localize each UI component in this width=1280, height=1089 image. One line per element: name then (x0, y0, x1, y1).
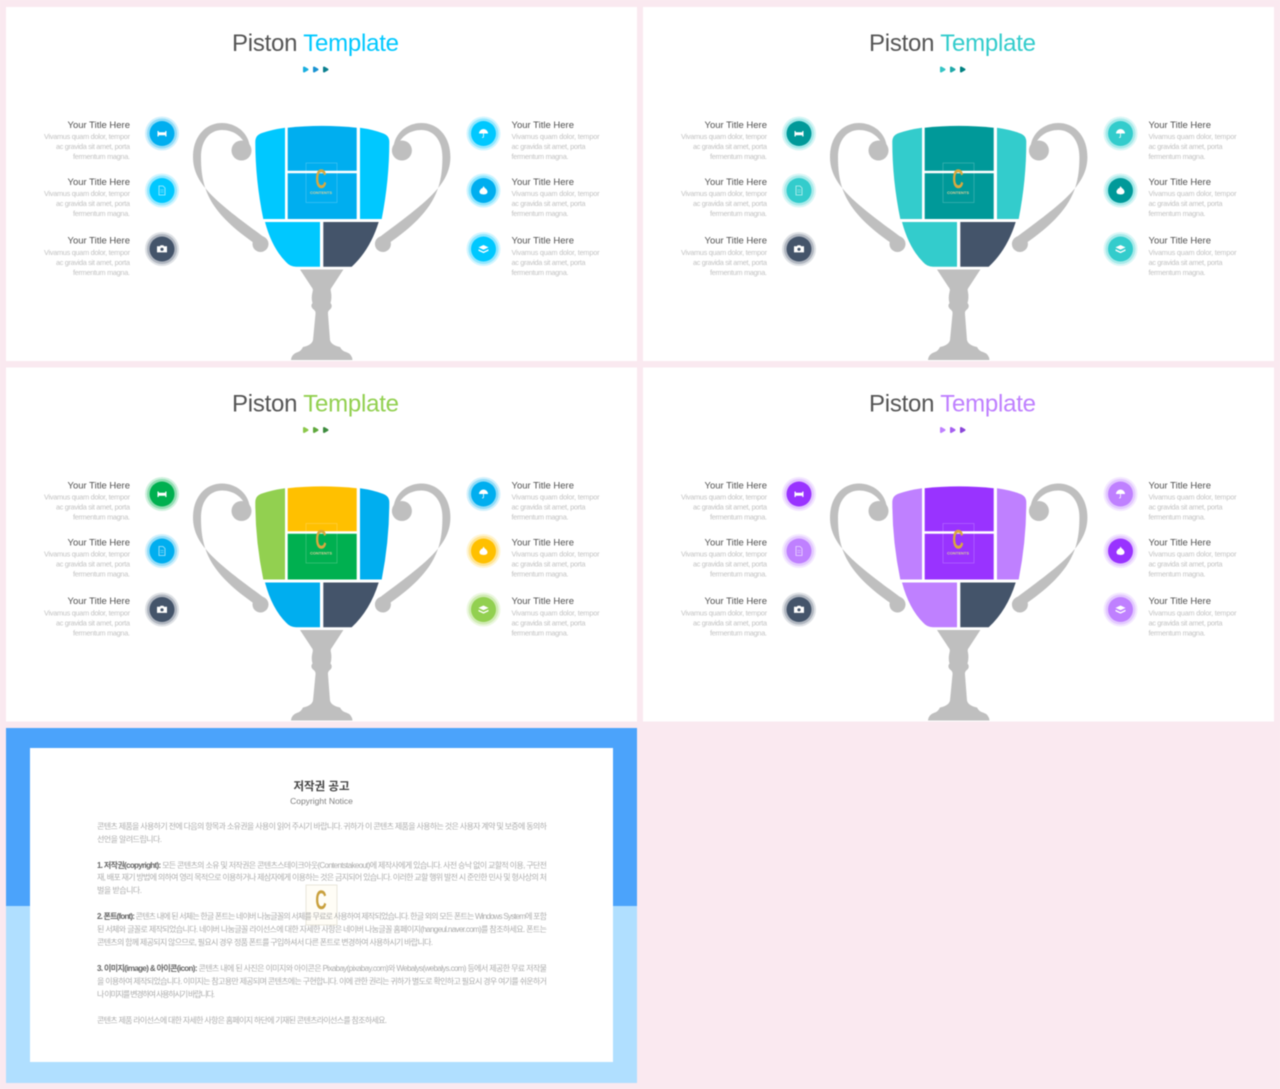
item left 3: Your Title Here (704, 596, 767, 607)
item right 3 (1104, 232, 1237, 277)
panel: copyright notice (6, 728, 637, 1083)
item right 1 (1104, 477, 1237, 522)
item right 1: Vivamus quam dolor, tempor (512, 492, 600, 502)
item left 1: Vivamus quam dolor, tempor (44, 132, 131, 141)
arrows (941, 428, 964, 432)
item right 2: Vivamus quam dolor, tempor (1148, 189, 1237, 198)
item right 2: Vivamus quam dolor, tempor (512, 189, 600, 198)
logo: C (315, 164, 327, 194)
item right 3: Your Title Here (512, 596, 574, 607)
logo: CONTENTS (947, 550, 969, 556)
item right 2 (466, 174, 600, 218)
item left 2: fermentum magna. (73, 570, 130, 578)
logo (943, 163, 974, 202)
item right 1: fermentum magna. (1148, 512, 1206, 522)
arrows (304, 68, 328, 72)
item left 3: ac gravida sit amet, porta (56, 618, 131, 628)
item left 2 (44, 534, 179, 578)
section 1 text: 재, 배포 재기 방법에 의하여 영리 목적으로 이용하거나 제삼자에게 이용하는 것은 금지되어 있습니다. 이러한 교할 행위 발전 시 준인한 민사 및 형사상의 처 (97, 872, 547, 882)
trophy (193, 484, 450, 720)
item right 1 (1104, 116, 1237, 161)
item right 1: ac gravida sit amet, porta (512, 142, 586, 151)
trophy (830, 484, 1087, 720)
item right 3: Vivamus quam dolor, tempor (512, 608, 600, 618)
item right 2: Vivamus quam dolor, tempor (512, 550, 600, 558)
logo (306, 163, 337, 202)
intro text (97, 821, 548, 844)
item left 2: fermentum magna. (710, 570, 767, 578)
item left 3: Your Title Here (704, 236, 767, 246)
item left 3 (681, 232, 816, 277)
item left 1 (681, 477, 816, 522)
item right 3: ac gravida sit amet, porta (1148, 618, 1223, 628)
arrows (941, 68, 964, 72)
section 2 text: 2. 폰트(font): 콘텐츠 내에 된 서체는 한글 폰트는 네이버 나눔글꼴의 서체를 무료로 사용하여 제작되었습니다. 한글 외의 모든 폰트는 Windows System에 포함 (97, 911, 548, 921)
logo: C (952, 524, 964, 555)
item right 2: Your Title Here (512, 538, 574, 548)
item left 1: Vivamus quam dolor, tempor (681, 492, 768, 502)
item right 2: fermentum magna. (1148, 209, 1206, 218)
logo: CONTENTS (310, 190, 332, 195)
section 3 text: 나 이미지를 변경하여 사용하시기 바랍니다. (97, 989, 215, 999)
item left 3: fermentum magna. (73, 628, 130, 638)
item left 1: fermentum magna. (73, 152, 130, 161)
item left 3: ac gravida sit amet, porta (56, 258, 131, 267)
item right 2: fermentum magna. (512, 570, 568, 578)
item left 1: Your Title Here (68, 480, 130, 492)
item right 1: Your Title Here (1148, 120, 1211, 131)
item right 1 (466, 116, 600, 161)
heading: 저작권 공고 (293, 779, 350, 793)
item left 2: ac gravida sit amet, porta (56, 199, 131, 208)
intro text: 콘텐츠 제품을 사용하기 전에 다음의 항목과 소유권을 사용이 읽어 주시기 바랍니다. 귀하가 이 콘텐츠 제품을 사용하는 것은 사용자 계약 및 보증에 동의하 (97, 821, 548, 831)
item right 3: fermentum magna. (512, 628, 568, 638)
item left 1 (44, 116, 179, 161)
item left 1: Your Title Here (704, 120, 767, 131)
panel: multicolour slide (6, 368, 637, 722)
title: Piston Template (869, 390, 1036, 418)
item left 2: Vivamus quam dolor, tempor (681, 189, 768, 198)
item left 3: Vivamus quam dolor, tempor (44, 608, 131, 618)
subheading: Copyright Notice (290, 796, 353, 806)
item left 3 (44, 592, 179, 638)
item right 2: ac gravida sit amet, porta (1148, 560, 1223, 568)
section 1 text: 벌을 받습니다. (97, 885, 142, 895)
item right 1: Your Title Here (512, 480, 574, 492)
item right 2 (1104, 534, 1237, 578)
item right 3 (466, 232, 600, 277)
intro text: 선언을 알려드립니다. (97, 834, 162, 844)
item right 3: fermentum magna. (1148, 268, 1206, 277)
item right 1: ac gravida sit amet, porta (512, 502, 586, 512)
item left 2: ac gravida sit amet, porta (693, 560, 768, 568)
item right 2: Your Title Here (1148, 538, 1211, 548)
item right 1: Vivamus quam dolor, tempor (1148, 132, 1237, 141)
item left 1: fermentum magna. (710, 512, 767, 522)
item left 1: ac gravida sit amet, porta (56, 502, 131, 512)
item right 3 (466, 592, 600, 638)
item left 2 (681, 174, 816, 218)
item left 1: fermentum magna. (73, 512, 130, 522)
item left 1: ac gravida sit amet, porta (693, 502, 768, 512)
item right 1: Vivamus quam dolor, tempor (512, 132, 600, 141)
item left 1 (681, 116, 816, 161)
item right 3: Vivamus quam dolor, tempor (512, 248, 600, 257)
item left 3: ac gravida sit amet, porta (693, 618, 768, 628)
item right 1: Your Title Here (512, 120, 574, 131)
item right 1: fermentum magna. (512, 152, 568, 161)
item left 3: fermentum magna. (73, 268, 130, 277)
item right 2: fermentum magna. (512, 209, 568, 218)
item right 1: Vivamus quam dolor, tempor (1148, 492, 1237, 502)
item left 3: Your Title Here (68, 596, 130, 607)
item left 3: Vivamus quam dolor, tempor (681, 608, 768, 618)
item right 3: fermentum magna. (1148, 628, 1206, 638)
item left 2: ac gravida sit amet, porta (56, 560, 131, 568)
item left 1: Vivamus quam dolor, tempor (44, 492, 131, 502)
item right 3: Your Title Here (1148, 236, 1211, 246)
item left 3: ac gravida sit amet, porta (693, 258, 768, 267)
item left 1: Your Title Here (68, 120, 130, 131)
item right 3: Your Title Here (512, 236, 574, 246)
item right 1: fermentum magna. (1148, 152, 1206, 161)
item left 3 (44, 232, 179, 277)
item left 3: fermentum magna. (710, 628, 767, 638)
arrows (304, 428, 328, 432)
item right 1: ac gravida sit amet, porta (1148, 142, 1223, 151)
item left 2: Your Title Here (704, 177, 767, 188)
section 3 text: 을 이용하여 제작되었습니다. 이미지는 참고용만 제공되며 콘텐츠에는 구현합니다. 이에 관한 권리는 귀하가 별도로 확인하고 필요시 경우 여기를 쉬운하거 (97, 976, 547, 986)
item right 1: Your Title Here (1148, 480, 1211, 492)
item left 2: ac gravida sit amet, porta (693, 199, 768, 208)
item left 1: Your Title Here (704, 480, 767, 492)
section 1 text (97, 860, 547, 895)
section 2 text (97, 911, 548, 947)
item right 2: ac gravida sit amet, porta (512, 199, 586, 208)
closing text: 콘텐츠 제품 라이선스에 대한 자세한 사항은 홈페이지 하단에 기재된 콘텐츠라이선스를 참조하세요. (97, 1015, 387, 1025)
item left 2: Vivamus quam dolor, tempor (44, 189, 131, 198)
item left 3 (681, 592, 816, 638)
item right 3 (1104, 592, 1237, 638)
item right 3: Your Title Here (1148, 596, 1211, 607)
item left 3: Vivamus quam dolor, tempor (44, 248, 131, 257)
item right 1: ac gravida sit amet, porta (1148, 502, 1223, 512)
item right 3: ac gravida sit amet, porta (1148, 258, 1223, 267)
item right 3: fermentum magna. (512, 268, 568, 277)
item left 2 (44, 174, 179, 218)
item right 2: Your Title Here (1148, 177, 1211, 188)
item left 2: fermentum magna. (73, 209, 130, 218)
item right 3: Vivamus quam dolor, tempor (1148, 248, 1237, 257)
section 2 text: 된 서체와 글꼴로 제작되었습니다. 네이버 나눔글꼴 라이선스에 대한 자세한 사항은 네이버 나눔글꼴 홈페이지(hangeul.naver.com)를 참조하세요. 폰트는 (97, 924, 547, 934)
item left 2: fermentum magna. (710, 209, 767, 218)
logo (306, 524, 337, 563)
item right 2: fermentum magna. (1148, 570, 1206, 578)
item right 2 (466, 534, 600, 578)
section 3 text (97, 963, 547, 999)
item left 2: Your Title Here (704, 538, 767, 548)
item right 2: ac gravida sit amet, porta (1148, 199, 1223, 208)
item right 2: Your Title Here (512, 177, 574, 188)
logo: CONTENTS (310, 550, 332, 556)
item left 1 (44, 477, 179, 522)
item left 1: ac gravida sit amet, porta (56, 142, 131, 151)
item right 2: ac gravida sit amet, porta (512, 560, 586, 568)
item left 1: ac gravida sit amet, porta (693, 142, 768, 151)
panel: purple slide (643, 368, 1274, 722)
item right 1 (466, 477, 600, 522)
logo: C (952, 164, 964, 194)
item right 1: fermentum magna. (512, 512, 568, 522)
trophy (193, 123, 450, 360)
trophy (830, 123, 1087, 360)
title: Piston Template (232, 390, 399, 418)
item left 3: Vivamus quam dolor, tempor (681, 248, 768, 257)
section 1 text: 1. 저작권(copyright): 모든 콘텐츠의 소유 및 저작권은 콘텐츠스테이크아웃(Contentstakeout)에 제작사에게 있습니다. 사전 승낙 없이 교할적 이용, 구단전 (97, 860, 547, 870)
item left 1: fermentum magna. (710, 152, 767, 161)
title: Piston Template (869, 30, 1036, 57)
section 3 text: 3. 이미지(image) & 아이콘(icon): 콘텐츠 내에 된 사진은 이미지와 아이콘은 Pixabay(pixabay.com)와 Webalys(webalys.com) 등에서 제공한 무료 저작물 (97, 963, 547, 973)
title: Piston Template (232, 30, 399, 57)
item left 3: fermentum magna. (710, 268, 767, 277)
panel: blue slide (6, 7, 637, 361)
logo: C (315, 524, 327, 555)
logo (306, 885, 337, 925)
panel: teal slide (643, 7, 1274, 361)
item left 2: Your Title Here (68, 538, 130, 548)
item left 2 (681, 534, 816, 578)
logo: CONTENTS (947, 190, 969, 195)
item left 2: Your Title Here (68, 177, 130, 188)
item right 3: ac gravida sit amet, porta (512, 258, 586, 267)
section 2 text: 콘텐츠의 함께 제공되지 않으므로, 필요시 경우 정품 폰트를 구입하셔서 다른 폰트로 변경하여 사용하시기 바랍니다. (97, 937, 433, 947)
logo (943, 524, 974, 563)
item left 1: Vivamus quam dolor, tempor (681, 132, 768, 141)
item left 3: Your Title Here (68, 236, 130, 246)
item left 2: Vivamus quam dolor, tempor (681, 550, 768, 558)
item right 2: Vivamus quam dolor, tempor (1148, 550, 1237, 558)
item right 2 (1104, 174, 1237, 218)
item left 2: Vivamus quam dolor, tempor (44, 550, 131, 558)
item right 3: ac gravida sit amet, porta (512, 618, 586, 628)
item right 3: Vivamus quam dolor, tempor (1148, 608, 1237, 618)
logo: C (315, 885, 327, 915)
